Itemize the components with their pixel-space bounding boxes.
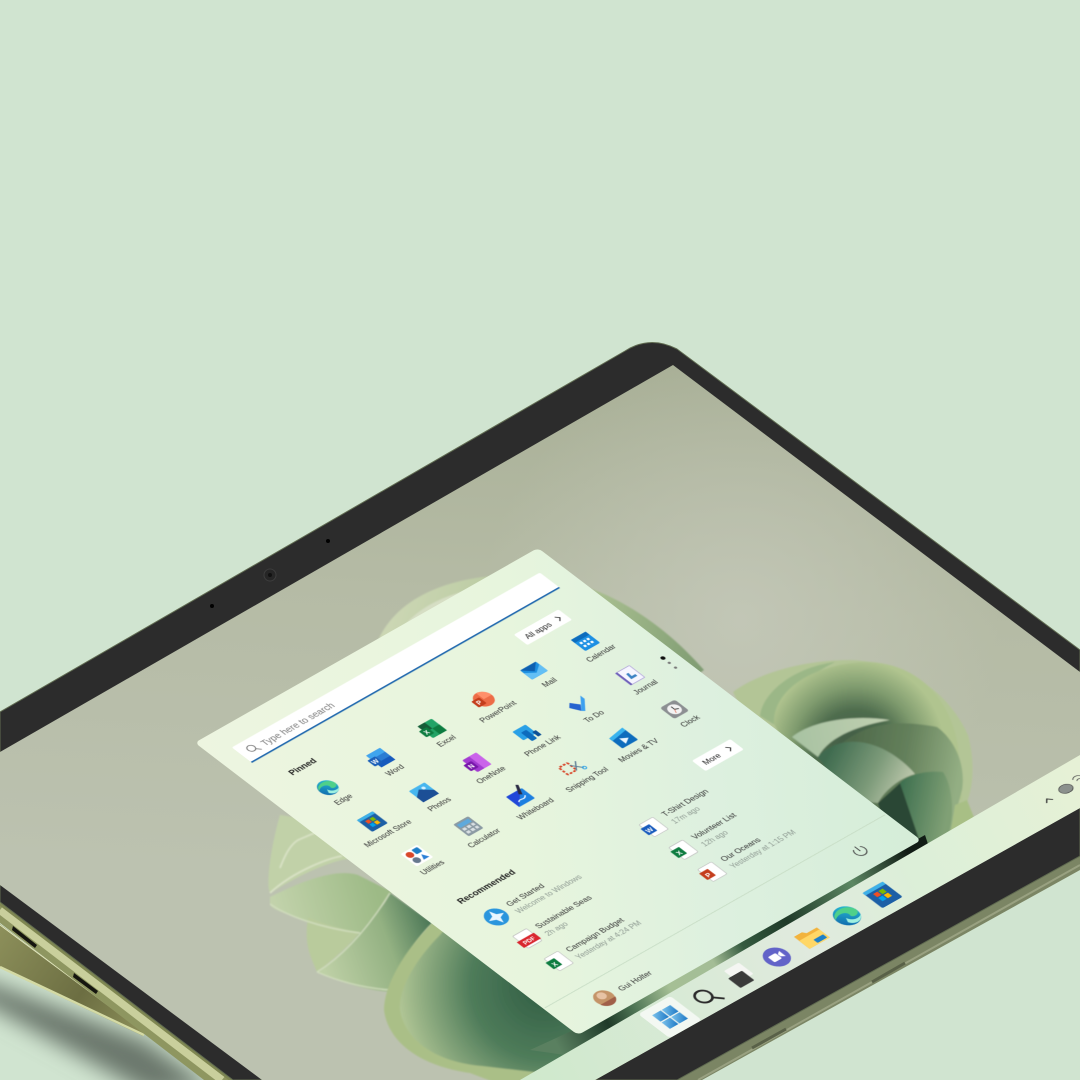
app: Calendar: Calendar bbox=[584, 643, 619, 664]
app: Microsoft Store bbox=[342, 803, 415, 849]
app: Phone Link bbox=[503, 719, 563, 758]
app: Edge bbox=[312, 777, 356, 807]
icon: tray caret bbox=[1044, 797, 1053, 803]
app: Excel: X bbox=[423, 729, 433, 736]
icon: taskbar chat bbox=[757, 944, 797, 970]
app: Clock bbox=[659, 699, 702, 729]
recommended: Campaign Budget: X bbox=[551, 961, 560, 968]
panel: start menu bbox=[195, 548, 921, 1035]
icon: taskbar Edge bbox=[827, 902, 867, 929]
button: More: More bbox=[700, 752, 724, 766]
kickstand shadow bbox=[0, 975, 215, 1080]
app: Edge: Edge bbox=[332, 792, 356, 807]
tablet frame: lower left edge bbox=[0, 898, 240, 1080]
recommended: Volunteer List bbox=[666, 811, 749, 861]
button: More bbox=[692, 739, 744, 771]
recommended: Volunteer List: X bbox=[675, 850, 685, 857]
user profile: Gui Holter bbox=[616, 969, 655, 993]
app: OneNote bbox=[454, 749, 509, 785]
app: Whiteboard bbox=[492, 779, 556, 822]
gap between start menu and taskbar bbox=[530, 835, 930, 1060]
app: Calculator bbox=[446, 812, 503, 850]
button: All apps bbox=[514, 609, 572, 645]
recommended: Sustainable Seas: PDF bbox=[522, 936, 538, 946]
app: Journal bbox=[611, 663, 661, 696]
recommended: Sustainable Seas: Sustainable Seas bbox=[533, 894, 594, 930]
app: Whiteboard: Whiteboard bbox=[515, 797, 556, 822]
button: All apps: All apps bbox=[522, 621, 554, 640]
recommended: T-Shirt Design: W bbox=[645, 827, 656, 835]
icon: tray cloud bbox=[1056, 782, 1076, 795]
recommended: Our Oceans bbox=[695, 821, 798, 883]
icon: taskbar search bbox=[691, 986, 725, 1008]
recommended: T-Shirt Design: 17m ago bbox=[669, 805, 703, 825]
tablet frame: lower right edge bbox=[670, 850, 1080, 1080]
recommended: Our Oceans: Our Oceans bbox=[718, 836, 763, 863]
app: Microsoft Store: Microsoft Store bbox=[362, 818, 415, 849]
recommended: T-Shirt Design bbox=[636, 787, 721, 839]
app: Photos bbox=[406, 781, 454, 813]
recommended: Volunteer List: 12h ago bbox=[699, 829, 731, 848]
recommended: Campaign Budget: Yesterday at 4:24 PM bbox=[573, 919, 644, 961]
app: Word: Word bbox=[384, 763, 407, 778]
search box: Type here to search bbox=[258, 701, 338, 748]
recommended: Our Oceans: Yesterday at 1:15 PM bbox=[728, 829, 798, 870]
app: Excel: Excel bbox=[435, 734, 459, 749]
app: Phone Link: Phone Link bbox=[522, 734, 563, 758]
app: Snipping Tool: Snipping Tool bbox=[564, 766, 611, 794]
app: Mail: Mail bbox=[540, 676, 560, 689]
recommended: Get Started bbox=[478, 865, 584, 929]
recommended: Our Oceans: P bbox=[704, 872, 714, 879]
heading: Pinned: Pinned bbox=[286, 757, 319, 777]
kickstand bbox=[0, 924, 145, 1036]
flower: lower left petals bbox=[268, 815, 432, 992]
start menu and taskbar contents (isometric plane) bbox=[195, 469, 1080, 1067]
icon: taskbar Store bbox=[862, 882, 903, 908]
icon: taskbar Windows button bbox=[638, 996, 702, 1038]
recommended: Campaign Budget: Campaign Budget bbox=[564, 916, 627, 953]
icon: taskbar file explorer bbox=[794, 925, 830, 949]
app: Photos: Photos bbox=[426, 796, 454, 813]
app: OneNote: OneNote bbox=[474, 764, 509, 785]
app: Snipping Tool bbox=[546, 752, 611, 794]
screen wallpaper bbox=[0, 365, 1080, 1080]
heading: Recommended: Recommended bbox=[455, 868, 518, 906]
flower: bottom petal bbox=[384, 923, 638, 1080]
search box bbox=[232, 573, 560, 763]
icon: tray wifi bbox=[1071, 774, 1080, 782]
app: Clock: Clock bbox=[678, 714, 702, 729]
footer divider bbox=[545, 815, 885, 1008]
app: Calendar bbox=[565, 628, 619, 664]
recommended: Get Started: Get Started bbox=[504, 882, 547, 908]
tablet bezel bbox=[0, 342, 1080, 1080]
app: To Do: To Do bbox=[582, 709, 607, 724]
icon: taskbar task view bbox=[721, 963, 759, 988]
app: Calculator: Calculator bbox=[466, 827, 503, 850]
app: Word: W bbox=[370, 758, 382, 766]
recommended: Sustainable Seas bbox=[510, 894, 604, 950]
flower: right petals bbox=[733, 660, 976, 850]
icon: power bbox=[850, 844, 870, 857]
camera and sensors bbox=[210, 539, 330, 608]
app: Movies & TV: Movies & TV bbox=[616, 737, 662, 764]
page dots bbox=[659, 656, 678, 670]
app: Mail bbox=[520, 662, 561, 690]
app: Movies & TV bbox=[596, 721, 662, 764]
app: Word bbox=[363, 748, 407, 778]
ports bbox=[12, 926, 98, 994]
user profile bbox=[588, 966, 659, 1009]
app: PowerPoint: PowerPoint bbox=[478, 699, 520, 724]
recommended: Volunteer List: Volunteer List bbox=[689, 811, 739, 841]
app: Excel bbox=[415, 719, 459, 749]
flower: top petals bbox=[379, 576, 704, 672]
recommended: Get Started: Welcome to Windows bbox=[513, 873, 584, 915]
app: PowerPoint bbox=[458, 684, 520, 724]
app: Utilities bbox=[398, 843, 447, 876]
recommended: Sustainable Seas: 2h ago bbox=[543, 920, 571, 937]
app: To Do bbox=[564, 695, 607, 724]
recommended: T-Shirt Design: T-Shirt Design bbox=[660, 787, 711, 818]
app: PowerPoint: P bbox=[475, 700, 485, 706]
app: Journal: Journal bbox=[631, 678, 661, 696]
recommended: Campaign Budget bbox=[542, 912, 644, 973]
app: OneNote: N bbox=[467, 763, 477, 770]
taskbar bbox=[520, 755, 1080, 1080]
app: Utilities: Utilities bbox=[418, 859, 447, 876]
